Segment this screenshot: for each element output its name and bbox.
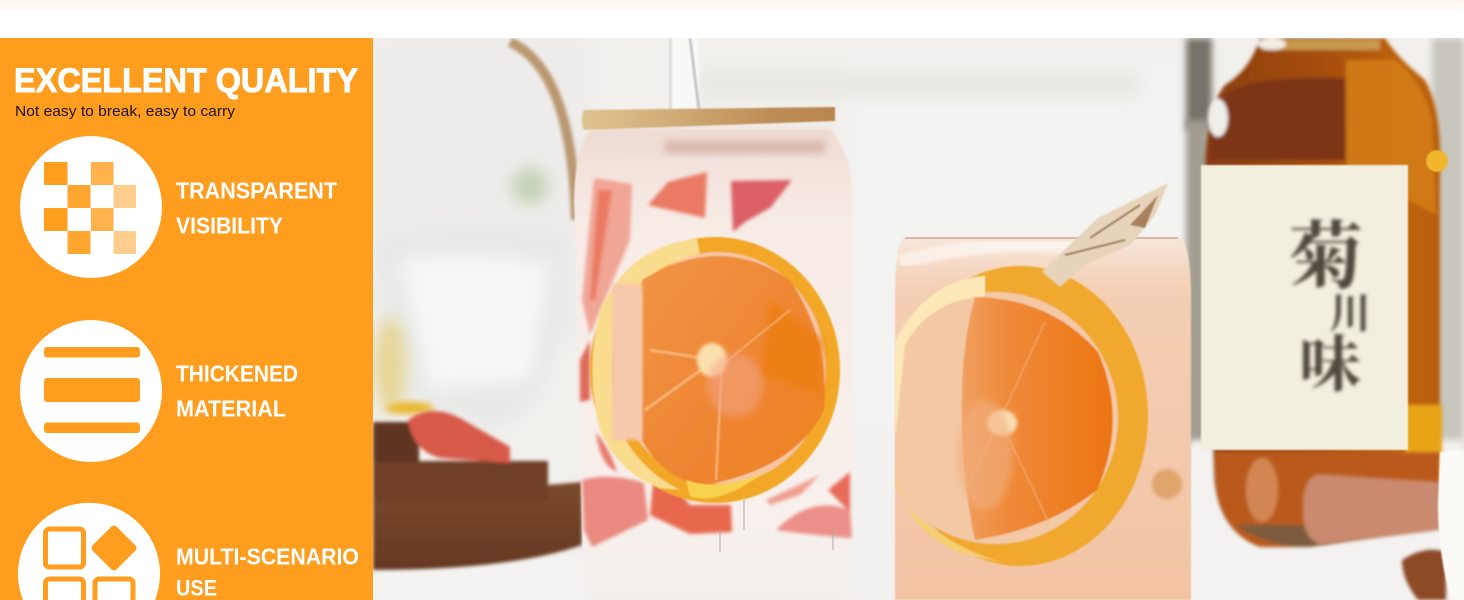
- jar frost at the bottom: [586, 552, 850, 600]
- label: USE: [176, 576, 217, 600]
- label: VISIBILITY: [176, 212, 283, 238]
- top banner strip: [0, 0, 1464, 16]
- label calligraphy: 味: [1299, 315, 1361, 404]
- photo background: [373, 38, 1464, 600]
- bottle body: [1205, 38, 1442, 547]
- background glass bowl: [414, 352, 545, 417]
- photo: drinks on a bright kitchen counter: [373, 38, 1464, 600]
- label: MATERIAL: [176, 396, 286, 422]
- label calligraphy: [1288, 216, 1369, 394]
- label: THICKENED: [176, 360, 298, 386]
- dried fruit garnish: [1042, 183, 1168, 287]
- jar lid: [582, 107, 835, 130]
- bottle label: [1201, 165, 1408, 450]
- tall glass with orange slice: [874, 183, 1191, 600]
- jar body: [573, 130, 852, 547]
- label calligraphy: 川: [1329, 281, 1371, 341]
- label: MULTI-SCENARIO: [176, 544, 359, 570]
- straw: [669, 38, 699, 112]
- wooden board with chocolate and strawberry: [373, 411, 582, 570]
- orange slice 1: [590, 237, 840, 503]
- feature: transparent visibility: [20, 136, 337, 278]
- glass body: [895, 237, 1191, 600]
- icon: checker squares: [20, 136, 162, 278]
- orange feature panel: [0, 38, 373, 600]
- wooden stick: [1303, 474, 1440, 545]
- background fruit glow: [374, 317, 406, 413]
- orange 2 segment lines: [974, 321, 1050, 524]
- watermelon pieces: [580, 172, 852, 547]
- icon: layered bars: [20, 320, 162, 462]
- background herb: [512, 168, 548, 204]
- label: [176, 544, 359, 600]
- glass bubble: [1152, 469, 1182, 499]
- label: [176, 366, 298, 416]
- heading: EXCELLENT QUALITY: [14, 62, 358, 100]
- background basket handle: [510, 42, 576, 220]
- foreground white cup: [1438, 450, 1464, 600]
- icon: app grid: [18, 503, 160, 600]
- orange slice 2: [874, 266, 1148, 566]
- subheading: Not easy to break, easy to carry: [15, 104, 236, 120]
- cinnamon: [1402, 550, 1446, 600]
- feature: thickened material: [20, 320, 298, 462]
- label: TRANSPARENT: [176, 178, 337, 204]
- feature: multi-scenario use: [18, 503, 359, 600]
- orange 1 segment lines: [645, 310, 790, 480]
- bottle light dot: [1426, 150, 1448, 172]
- bottle with paper label: [1201, 38, 1464, 600]
- label: [176, 182, 337, 234]
- jar with fruit and orange slice: [574, 107, 852, 600]
- label calligraphy: 菊: [1289, 198, 1363, 304]
